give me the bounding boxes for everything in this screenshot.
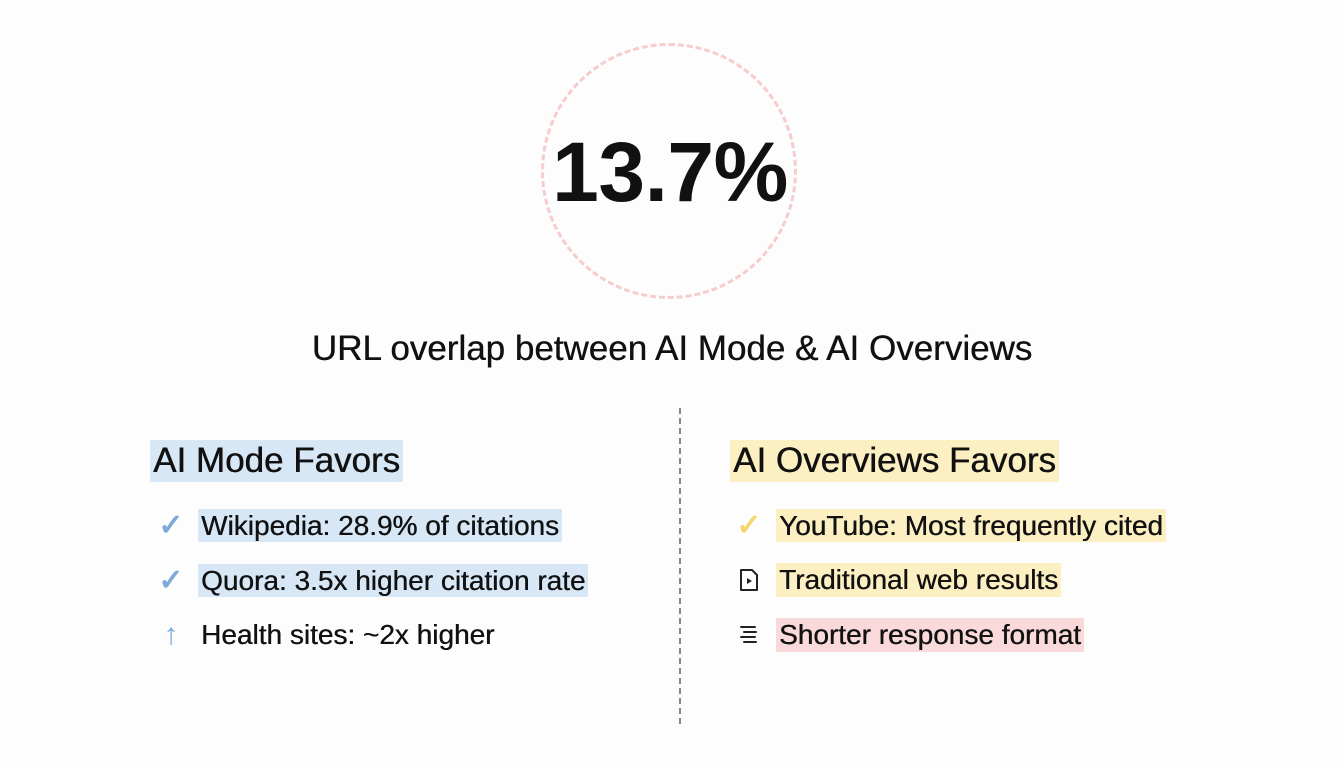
stat circle bbox=[541, 43, 797, 299]
heading: AI Mode Favors: AI Mode Favors bbox=[153, 441, 400, 480]
item: Shorter response format: Shorter response format bbox=[779, 619, 1081, 650]
subtitle: URL overlap between AI Mode & AI Overviews bbox=[312, 329, 1032, 368]
item: Quora: ✓ bbox=[158, 564, 184, 597]
item: Traditional web results: Traditional web results bbox=[779, 564, 1058, 595]
panel: AI Overviews Favors bbox=[730, 440, 1166, 652]
panel: AI Mode Favors bbox=[150, 440, 588, 651]
big number: 13.7% bbox=[552, 125, 788, 219]
heading: AI Overviews Favors: AI Overviews Favors bbox=[733, 441, 1056, 480]
item: Wikipedia: ✓ bbox=[158, 509, 184, 542]
item: YouTube: YouTube: Most frequently cited bbox=[779, 510, 1163, 541]
item: Health sites: ↑ bbox=[164, 618, 178, 651]
item: Health sites: Health sites: ~2x higher bbox=[201, 619, 494, 650]
item: Quora: Quora: 3.5x higher citation rate bbox=[201, 565, 585, 596]
item: Wikipedia: Wikipedia: 28.9% of citations bbox=[201, 510, 559, 541]
item: YouTube: ✓ bbox=[736, 509, 762, 542]
divider bbox=[679, 408, 681, 724]
